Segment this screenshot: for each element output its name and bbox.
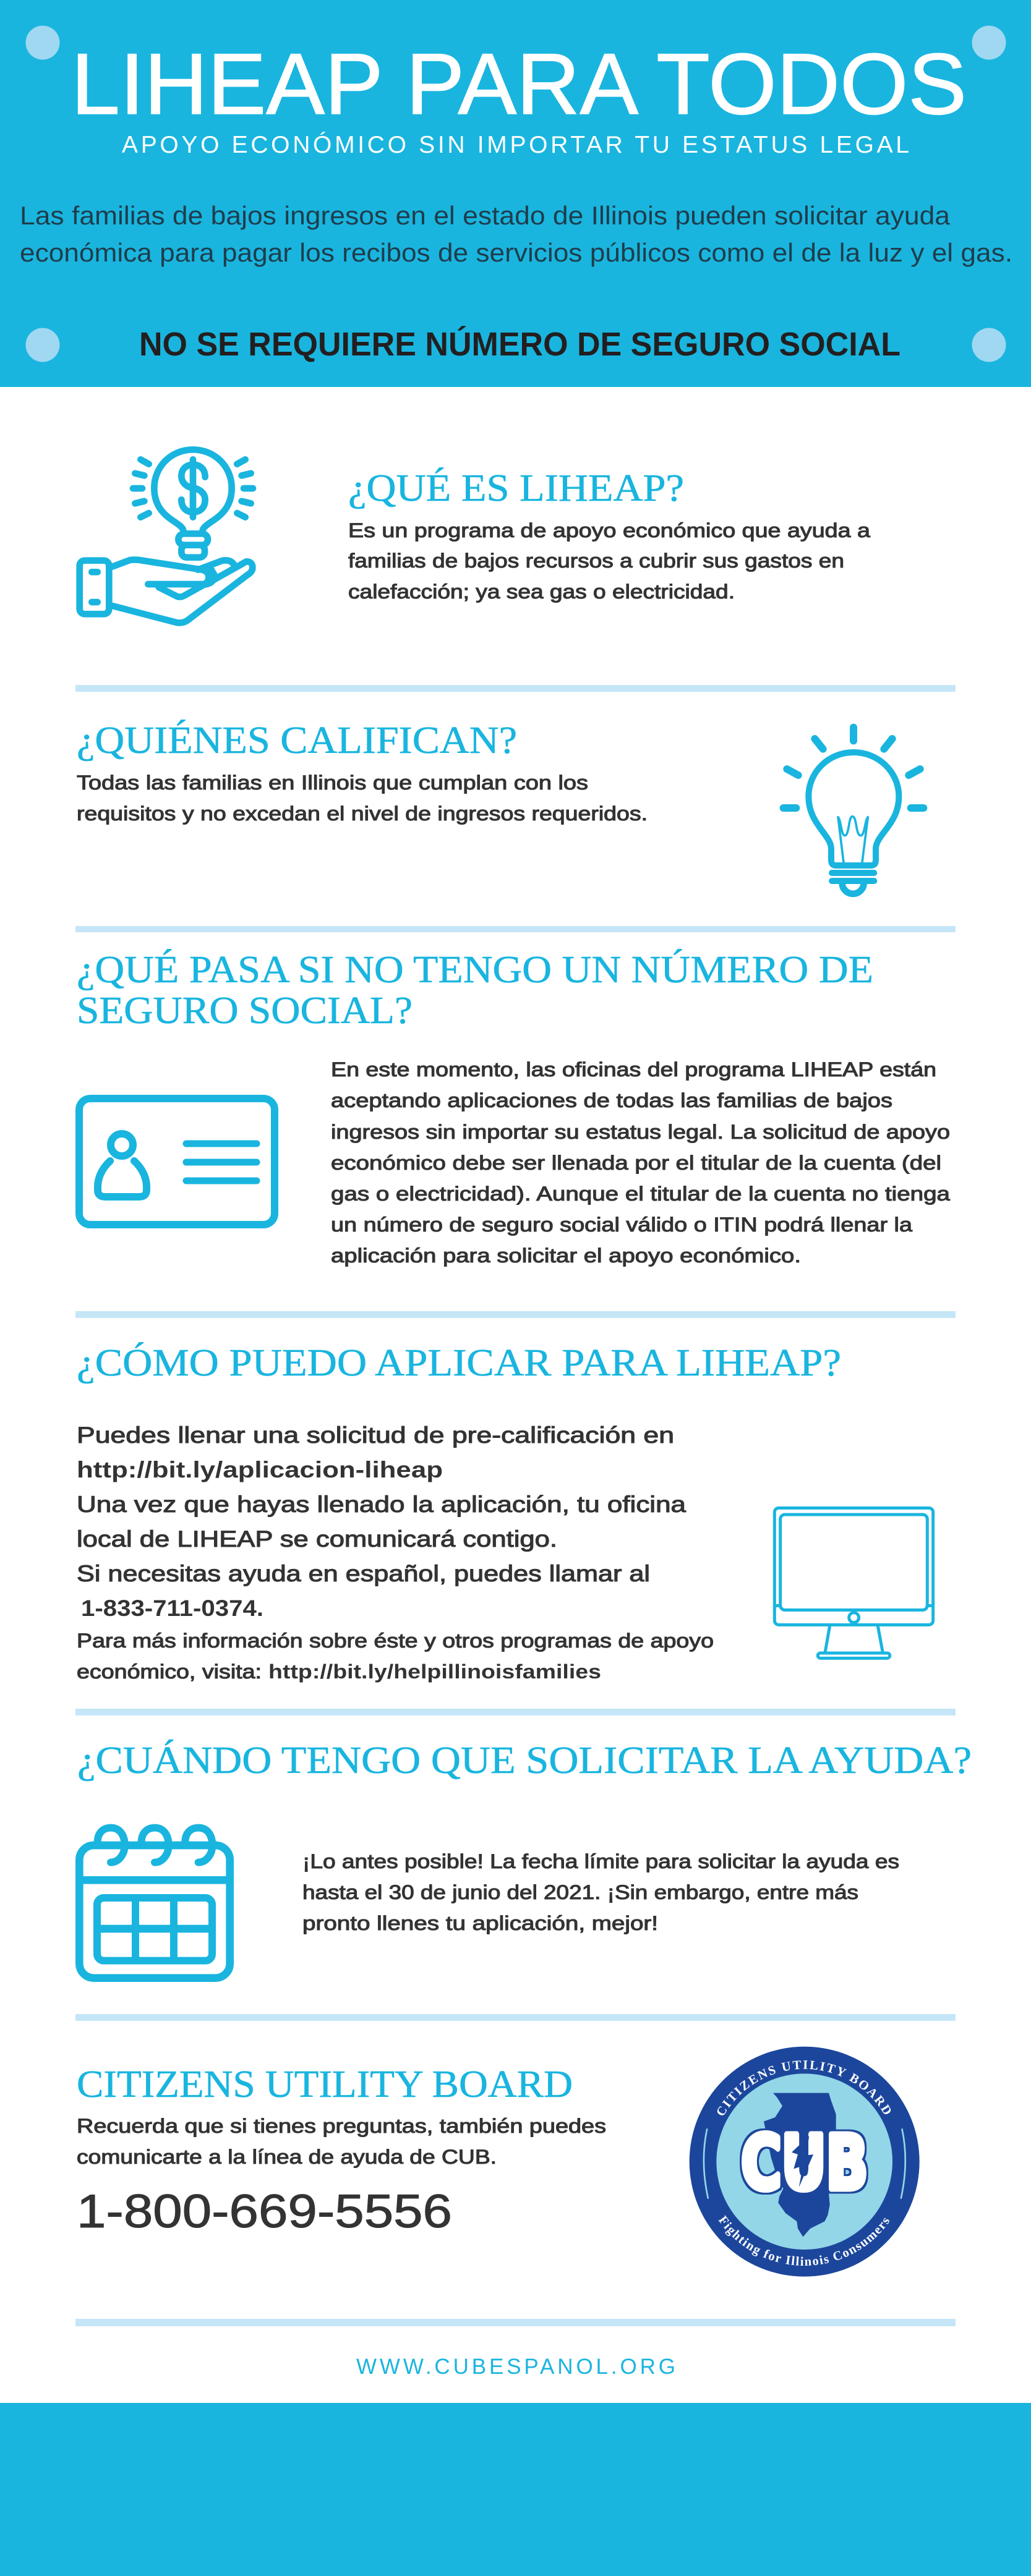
body text: ingresos sin importar su estatus legal. La solicitud de apoyo — [331, 1121, 950, 1143]
instructions text: Una vez que hayas llenado la aplicación, tu oficina — [77, 1492, 686, 1517]
body text: familias de bajos recursos a cubrir sus gastos en — [348, 550, 844, 572]
title: LIHEAP PARA TODOS — [71, 35, 967, 132]
panel: que es liheap — [80, 449, 870, 623]
instructions text: 1-833-711-0374. — [81, 1596, 263, 1621]
body text: hasta el 30 de junio del 2021. ¡Sin embargo, entre más — [302, 1881, 858, 1903]
instructions text: local de LIHEAP se comunicará contigo. — [77, 1526, 557, 1552]
panel: quienes califican — [77, 720, 923, 894]
body text — [348, 519, 870, 603]
footer band — [0, 2403, 1031, 2576]
instructions text: Puedes llenar una solicitud de pre-calificación en — [77, 1422, 674, 1448]
website link: WWW.CUBESPANOL.ORG — [356, 2355, 675, 2379]
subtitle: APOYO ECONÓMICO SIN IMPORTAR TU ESTATUS LEGAL — [122, 132, 909, 158]
instructions text: Para más información sobre éste y otros programas de apoyo — [77, 1630, 714, 1652]
body text: requisitos y no excedan el nivel de ingresos requeridos. — [77, 802, 648, 825]
instructions text: Si necesitas ayuda en español, puedes llamar al — [77, 1561, 650, 1586]
instructions text: http://bit.ly/aplicacion-liheap — [77, 1457, 443, 1482]
instructions text: económico, visita: — [77, 1660, 262, 1683]
heading: ¿QUÉ ES LIHEAP? — [348, 467, 684, 509]
body text — [331, 1058, 950, 1267]
body text: calefacción; ya sea gas o electricidad. — [348, 580, 735, 603]
body text: gas o electricidad). Aunque el titular de la cuenta no tienga — [331, 1183, 950, 1205]
icon: calendar — [79, 1828, 230, 1978]
body text: Recuerda que si tienes preguntas, también puedes — [77, 2115, 606, 2137]
body text — [302, 1850, 899, 1934]
body text — [77, 2115, 606, 2168]
icon: light bulb — [784, 728, 923, 894]
icon: id card — [79, 1099, 275, 1225]
header background — [0, 0, 1031, 387]
panel: citizens utility board — [77, 2046, 920, 2277]
body text: aplicación para solicitar el apoyo económico. — [331, 1244, 801, 1267]
logo: CUB: CUB — [741, 2121, 868, 2207]
intro paragraph: económica para pagar los recibos de servicios públicos como el de la luz y el gas. — [20, 238, 1012, 267]
body text: Todas las familias en Illinois que cumplan con los — [77, 772, 588, 794]
heading: SEGURO SOCIAL? — [77, 990, 413, 1032]
heading: ¿QUIÉNES CALIFICAN? — [77, 720, 517, 762]
body text: ¡Lo antes posible! La fecha límite para solicitar la ayuda es — [302, 1850, 899, 1872]
panel: header — [0, 0, 1031, 387]
heading: ¿QUÉ PASA SI NO TENGO UN NÚMERO DE — [77, 949, 873, 991]
intro paragraph — [20, 201, 1012, 267]
logo: CUB: CITIZENS UTILITY BOARD — [717, 2060, 891, 2115]
panel: como puedo aplicar — [77, 1342, 933, 1683]
body text: económico debe ser llenada por el titular de la cuenta (del — [331, 1152, 941, 1174]
body text: un número de seguro social válido o ITIN podrá llenar la — [331, 1214, 912, 1236]
body text: pronto llenes tu aplicación, mejor! — [302, 1912, 658, 1934]
logo: CUB: Fighting for Illinois Consumers — [719, 2215, 889, 2266]
heading: ¿CÓMO PUEDO APLICAR PARA LIHEAP? — [77, 1342, 841, 1384]
corner dots — [26, 26, 1006, 362]
panel: cuando solicitar — [77, 1740, 972, 1978]
heading — [77, 949, 873, 1032]
body text: Es un programa de apoyo económico que ayuda a — [348, 519, 870, 542]
intro paragraph: Las familias de bajos ingresos en el estado de Illinois pueden solicitar ayuda — [20, 201, 951, 230]
heading: ¿CUÁNDO TENGO QUE SOLICITAR LA AYUDA? — [77, 1740, 972, 1782]
phone number: 1-800-669-5556 — [77, 2185, 452, 2238]
body text: comunicarte a la línea de ayuda de CUB. — [77, 2146, 497, 2168]
instructions text: http://bit.ly/helpillinoisfamilies — [268, 1660, 601, 1683]
icon: computer monitor — [774, 1508, 933, 1658]
logo: CUB — [689, 2046, 920, 2277]
icon: hand holding money bulb — [80, 449, 253, 623]
instructions text — [77, 1422, 714, 1683]
body text: aceptando aplicaciones de todas las familias de bajos — [331, 1089, 892, 1112]
callout: no social security number required: NO SE REQUIERE NÚMERO DE SEGURO SOCIAL — [139, 326, 901, 363]
body text — [77, 772, 648, 825]
body text: En este momento, las oficinas del programa LIHEAP están — [331, 1058, 936, 1081]
heading: CITIZENS UTILITY BOARD — [77, 2064, 573, 2106]
panel: que pasa si no tengo numero — [77, 949, 950, 1267]
